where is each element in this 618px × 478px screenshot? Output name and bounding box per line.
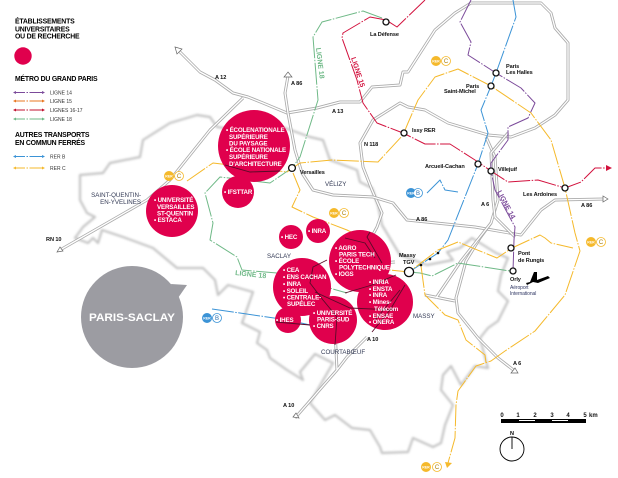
stations	[289, 19, 568, 277]
place names	[91, 181, 435, 356]
station labels: Paris	[506, 64, 519, 70]
road labels: RN 10	[46, 237, 61, 243]
road labels: A 13	[332, 109, 343, 115]
station labels: Versailles	[300, 170, 325, 176]
scale bar	[500, 413, 598, 423]
circle labels: SUPÉLEC	[287, 300, 316, 308]
circle labels: • ENSTA	[369, 286, 393, 293]
circle labels: • Mines-	[369, 299, 391, 306]
territory boundary	[75, 115, 508, 453]
compass: N	[510, 431, 514, 437]
massy dots	[420, 252, 439, 266]
place names: EN-YVELINES	[100, 199, 141, 206]
circle labels: PARIS TECH	[339, 252, 375, 258]
scale bar: 5	[583, 413, 587, 419]
road labels	[46, 75, 592, 409]
station labels: International	[510, 291, 536, 297]
station labels: Issy RER	[412, 128, 436, 134]
road labels: A 10	[283, 403, 294, 409]
RER badges: RER	[165, 174, 173, 178]
station labels: de Rungis	[518, 258, 544, 264]
circle labels: Télécom	[374, 306, 399, 313]
place names: COURTABŒUF	[321, 349, 365, 356]
circle labels	[154, 126, 399, 330]
road network	[57, 3, 608, 418]
road labels: A 12	[215, 75, 226, 81]
scale bar: 4	[566, 413, 570, 419]
circle labels: • ÉCOLE	[335, 257, 359, 265]
RER badges: C	[599, 240, 604, 246]
circle labels: • ÉCOLENATIONALE	[226, 126, 284, 134]
circle labels: D'ARCHITECTURE	[229, 161, 282, 168]
circle labels: • HEC	[281, 234, 298, 241]
RER badges: RER	[203, 316, 211, 320]
RER badges: B	[215, 316, 219, 322]
circle labels: • ENSAE	[369, 313, 393, 320]
RER badges: RER	[587, 240, 595, 244]
circle labels: • SOLEIL	[283, 288, 308, 295]
place names: SACLAY	[267, 253, 291, 260]
line 14	[460, 0, 535, 271]
road labels: A 6	[513, 361, 521, 367]
line 15	[342, 0, 606, 188]
circle labels: • INRA	[283, 281, 302, 288]
legend: UNIVERSITAIRES	[15, 26, 70, 34]
station labels: Villejuif	[498, 167, 517, 173]
university circles	[146, 110, 413, 344]
road labels: A 86	[581, 203, 592, 209]
station labels: Paris	[466, 84, 479, 90]
road labels: A 10	[367, 337, 378, 343]
circle labels: • UNIVERSITÉ	[154, 196, 193, 204]
station labels: Massy	[399, 253, 417, 259]
circle labels: ST-QUENTIN	[157, 210, 194, 218]
scale bar: 2	[533, 413, 537, 419]
circle labels: • ESTACA	[154, 217, 182, 224]
callout: Paris-Saclay: PARIS-SACLAY	[89, 312, 176, 324]
station labels	[300, 32, 557, 297]
scale bar: 3	[550, 413, 554, 419]
circle labels: • UNIVERSITÉ	[313, 309, 352, 317]
station labels: Arcueil-Cachan	[425, 164, 465, 170]
station labels: La Défense	[370, 32, 399, 38]
legend: EN COMMUN FERRÉS	[15, 138, 86, 147]
circle labels: SUPÉRIEURE	[229, 133, 268, 141]
legend: LIGNE 18	[50, 117, 72, 123]
circle labels: POLYTECHNIQUE	[339, 264, 390, 272]
legend: LIGNE 14	[50, 90, 72, 96]
legend	[13, 16, 98, 172]
compass	[500, 431, 524, 461]
line name label: ligne 14: LIGNE 14	[495, 190, 516, 221]
station labels: Pont	[518, 251, 530, 257]
RER badges: C	[342, 211, 347, 217]
callout: Paris-Saclay	[81, 266, 187, 368]
legend: RER B	[50, 154, 66, 160]
legend: ÉTABLISSEMENTS	[15, 16, 75, 26]
RER badges: C	[177, 174, 182, 180]
line name label: ligne 15: LIGNE 15	[349, 56, 365, 88]
legend: RER C	[50, 166, 66, 172]
circle labels: • INRA	[308, 228, 327, 235]
circle labels: • CEA	[283, 267, 300, 274]
circle labels: VERSAILLES	[157, 204, 194, 211]
circle labels: PARIS-SUD	[317, 316, 350, 324]
line name label: ligne 18 south: LIGNE 18	[235, 270, 267, 280]
road labels: N 118	[364, 142, 378, 148]
legend: LIGNE 15	[50, 99, 72, 105]
circle labels: • CNRS	[313, 323, 334, 330]
circle labels: DU PAYSAGE	[229, 140, 267, 148]
legend: MÉTRO DU GRAND PARIS	[15, 74, 98, 83]
station labels: Orly	[510, 277, 522, 283]
circle labels: • IOGS	[335, 271, 353, 278]
line name label: ligne 18 north: LIGNE 18	[314, 47, 325, 79]
circle labels: • CENTRALE-	[283, 294, 321, 302]
scale bar: 1	[516, 413, 520, 419]
circle labels: • ONERA	[369, 319, 395, 326]
station labels: Les Halles	[506, 70, 533, 76]
circle labels: • ENS CACHAN	[283, 274, 327, 281]
place names: MASSY	[413, 313, 435, 320]
circle labels: • IHES	[276, 317, 293, 324]
circle labels: • INRA	[369, 292, 388, 299]
RER B	[212, 0, 516, 325]
scale bar: km	[589, 413, 598, 419]
road labels: A 86	[291, 81, 302, 87]
scale bar: 0	[500, 413, 504, 419]
RER badges: RER	[407, 192, 415, 196]
place names: VÉLIZY	[325, 181, 346, 188]
circle labels: • AGRO	[335, 245, 357, 252]
RER C	[187, 69, 580, 463]
RER badges	[164, 56, 606, 472]
road labels: A 86	[416, 217, 427, 223]
RER badges: RER	[422, 466, 430, 470]
circle labels: SUPÉRIEURE	[229, 153, 268, 161]
legend: OU DE RECHERCHE	[15, 34, 80, 40]
station labels: Les Ardoines	[523, 192, 557, 198]
roads inside circles	[225, 165, 405, 345]
circle labels: • INRIA	[369, 279, 389, 286]
station labels: TGV	[403, 260, 415, 266]
legend: LIGNES 16-17	[50, 108, 83, 114]
RER badges: RER	[432, 60, 440, 64]
RER badges: RER	[330, 212, 338, 216]
circle labels: • IFSTTAR	[224, 189, 253, 196]
station labels: Aéroport	[510, 285, 529, 291]
place names: SAINT-QUENTIN-	[91, 192, 141, 199]
station labels: Saint-Michel	[444, 89, 476, 95]
circle labels: • ÉCOLE NATIONALE	[226, 146, 286, 154]
icon: plane	[526, 272, 550, 285]
RER badges: C	[435, 465, 440, 471]
transit lines	[187, 0, 612, 468]
legend: AUTRES TRANSPORTS	[15, 132, 90, 139]
road labels: A 6	[481, 202, 489, 208]
RER badges: C	[444, 59, 449, 65]
RER badges: B	[416, 191, 420, 197]
line 18	[205, 11, 510, 293]
